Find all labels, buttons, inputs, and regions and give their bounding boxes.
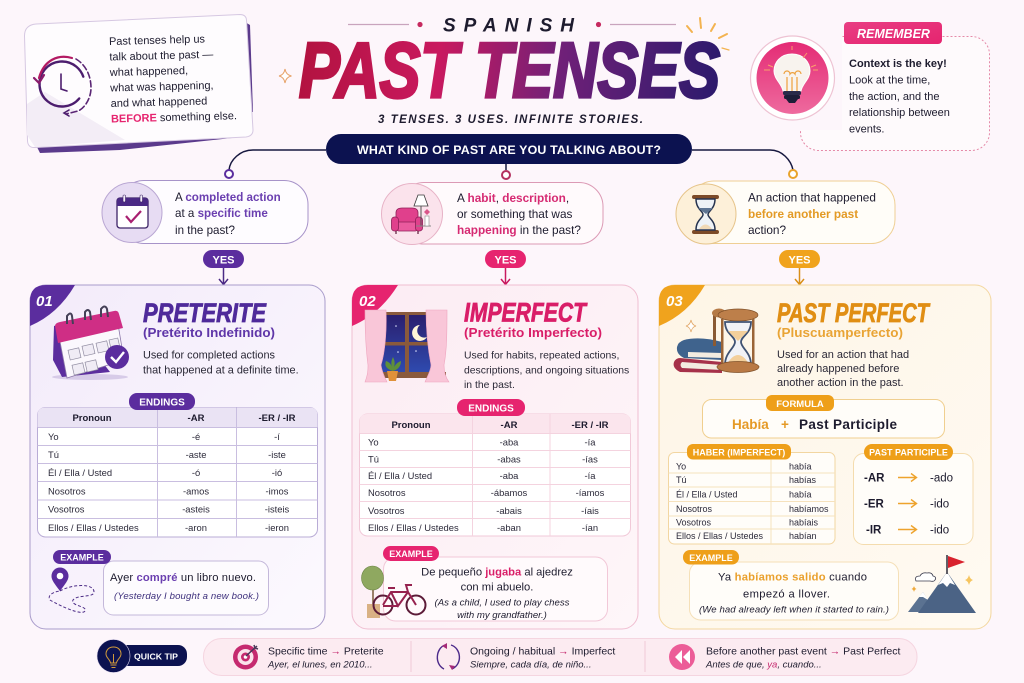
participle box: -IR [866,524,882,536]
endings table: -aste [186,449,206,460]
example box [104,561,268,615]
icon: bicycle and tree [362,566,426,618]
icon: night window with curtains [365,310,449,382]
endings table [38,408,318,537]
example box: De pequeño jugaba al ajedrez [421,566,573,578]
endings table: Nosotros [48,486,86,496]
intro text: Past tenses help us [109,33,206,48]
yes 2 [485,250,526,284]
remember badge: REMEMBER [857,27,930,41]
icon: tip bulb [106,647,121,668]
formula box: Había [732,417,769,432]
quick tip bar [204,638,917,676]
endings table: -asteis [182,504,210,514]
endings table: Vosotros [368,505,405,516]
remember text: the action, and the [849,91,940,103]
connector lines [225,150,797,179]
question 3 [676,181,895,244]
endings table: -AR [501,420,518,431]
heading: PAST TENSES [299,26,720,114]
endings table: Tú [48,449,59,460]
tip: before: Before another past event → Past Perfect [706,646,900,658]
endings table: -í [274,431,280,442]
intro text: and what happened [110,95,207,110]
haber table: Tú [676,475,687,485]
panel heading: PAST PERFECT [777,298,931,328]
question 3 text: before another past [748,207,858,221]
tip: specific time: Ayer, el lunes, en 2010... [267,660,372,670]
remember text: Look at the time, [849,74,930,86]
example badge: EXAMPLE [60,552,104,562]
panel: imperfect [352,285,638,629]
endings table: -íais [581,505,599,516]
endings table: Ellos / Ellas / Ustedes [48,522,139,533]
number tab 03: 03 [666,293,683,310]
endings table [360,414,630,536]
endings table: -aron [185,522,207,533]
haber badge [687,444,791,460]
icon: armchair and lamp [382,184,442,244]
endings badge [457,399,525,416]
endings table: -aba [500,436,519,448]
remember text [849,58,950,136]
yes pills and arrows [203,250,820,284]
endings table: -íamos [576,487,605,498]
endings table: -ías [582,454,598,464]
quick tip badge [97,640,187,672]
tip: specific time: Specific time → Preterite [268,646,384,658]
question 2 [382,182,603,244]
panel heading [777,298,931,340]
intro text: what happened, [109,65,188,79]
panel: preterite [30,285,325,629]
example box: con mi abuelo. [461,582,533,594]
question 2 text [457,191,581,237]
remember text: Context is the key! [849,58,947,70]
quick tip badge: QUICK TIP [134,652,178,662]
tagline: 3 TENSES. 3 USES. INFINITE STORIES. [378,114,643,126]
question 1 text: at a specific time [175,207,268,220]
panel heading: IMPERFECT [464,298,588,328]
number tab 03 [659,285,705,326]
haber table: habías [789,475,817,485]
example box: Ayer compré un libro nuevo. [110,572,256,584]
number tab 01 [30,285,75,326]
remember badge [844,22,942,44]
example badge [53,550,111,564]
endings table: -AR [188,413,205,424]
question 2 text: A habit, description, [457,191,569,205]
question 1 text: A completed action [175,191,281,204]
endings table: -amos [183,486,209,496]
formula box: + [781,417,789,432]
example box [690,562,898,620]
icon: title rays [687,18,729,50]
tip: ongoing [437,643,615,670]
endings table: Él / Ella / Usted [48,467,112,478]
description: another action in the past. [777,377,904,389]
participle badge [864,444,953,460]
question 1 [102,180,308,244]
endings table: -ER / -IR [572,420,609,431]
icon: map pin with route [49,568,94,612]
remember callout [750,22,990,150]
endings table: -imos [266,486,289,496]
haber table: habíais [789,518,819,528]
haber table: Vosotros [676,518,712,528]
endings table: Él / Ella / Usted [368,470,432,481]
panel heading: (Pretérito Indefinido) [143,325,275,340]
endings table: -iste [268,449,286,460]
endings table: -isteis [265,504,290,514]
endings table: Nosotros [368,487,406,498]
haber table: Él / Ella / Usted [676,490,738,500]
intro text: BEFORE something else. [111,110,237,125]
description: that happened at a definite time. [143,364,299,376]
question 1 text [175,191,281,237]
endings table: -ó [192,467,200,478]
endings table: -aba [500,470,519,481]
number tab 02 [352,285,398,326]
participle badge: PAST PARTICIPLE [869,448,948,458]
haber table: Ellos / Ellas / Ustedes [676,531,764,541]
icon: title sparkle [279,69,292,83]
example box [384,557,608,621]
intro text: what was happening, [109,80,214,95]
endings table: -ER / -IR [259,413,296,424]
participle box: -AR [864,472,885,484]
example box: (We had already left when it started to rain.) [699,604,889,616]
yes 1: YES [212,254,235,266]
tip: ongoing: Ongoing / habitual → Imperfect [470,646,615,658]
overline: Spanish [348,16,676,36]
description: Used for completed actions [143,350,276,362]
yes 1 [203,250,244,284]
panel: past perfect [659,285,991,629]
participle box: -ER [864,498,884,510]
tip: before [669,644,900,670]
panel heading: PRETERITE [143,298,267,328]
icon: clock with rewind arrow [30,52,94,116]
haber table: había [789,490,812,500]
question 2 text: or something that was [457,207,573,221]
endings table: -é [192,431,200,442]
description [777,349,909,389]
endings badge: ENDINGS [468,404,514,414]
haber table: habíamos [789,504,829,514]
icon: hourglass [676,184,736,244]
panel heading [143,298,275,340]
participle box [854,454,973,544]
remember text: events. [849,124,884,136]
icon: light bulb [750,36,834,120]
yes 3: YES [788,254,811,266]
question 2 text: happening in the past? [457,223,581,237]
icon: hourglass and books [674,308,759,373]
example badge [683,550,739,564]
example badge: EXAMPLE [389,549,433,559]
icon: sparkle [686,320,696,332]
description [464,350,629,391]
panel heading [464,298,602,340]
description: descriptions, and ongoing situations [464,366,629,376]
number tab 01: 01 [36,293,53,310]
question 3 text: action? [748,223,786,237]
question banner [326,134,692,164]
endings table: Tú [368,454,379,464]
tip: before: Antes de que, ya, cuando... [705,660,822,670]
endings table: Yo [48,431,59,442]
title block [279,16,729,126]
tip: ongoing: Siempre, cada día, de niño... [470,660,591,670]
haber table [668,452,835,544]
description: Used for habits, repeated actions, [464,350,619,362]
yes 3 [779,250,820,284]
question 3 text: An action that happened [748,190,876,204]
haber table: Nosotros [676,504,713,514]
number tab 02: 02 [359,293,376,310]
panel heading: (Pluscuamperfecto) [777,325,903,340]
participle box: -ido [930,524,949,536]
description: already happened before [777,363,899,375]
description: Used for an action that had [777,349,909,361]
endings table: Vosotros [48,504,85,514]
example box: (As a child, I used to play chess [435,598,570,608]
endings table: -abais [496,505,522,516]
endings table: -ían [582,522,598,533]
remember text: relationship between [849,107,950,119]
formula box: Past Participle [799,417,897,432]
example badge [383,546,439,561]
example badge: EXAMPLE [689,553,733,563]
haber table: habían [789,531,817,541]
endings table: -aban [497,522,521,533]
example box: Ya habíamos salido cuando [718,572,867,584]
endings table: -ábamos [491,487,528,498]
endings table: -ía [585,436,596,448]
endings table: Pronoun [72,413,112,424]
endings table: -ió [272,467,282,478]
haber table: Yo [676,462,686,472]
intro text [108,33,237,126]
tip: specific time [233,644,384,670]
yes 2: YES [494,254,517,266]
endings table: Yo [368,436,379,448]
intro text: talk about the past — [109,49,213,64]
panel heading: (Pretérito Imperfecto) [464,325,602,340]
intro card [24,14,253,153]
icon: calendar check [102,182,162,242]
question 1 text: in the past? [175,224,235,237]
participle box: -ido [930,498,949,510]
endings badge: ENDINGS [139,398,185,408]
description: in the past. [464,380,515,391]
haber badge: HABER (IMPERFECT) [693,448,785,458]
question banner: WHAT KIND OF PAST ARE YOU TALKING ABOUT? [357,143,661,157]
endings badge [129,393,195,410]
description [143,350,299,376]
question 3 text [748,190,876,237]
endings table: -abas [497,454,521,464]
example box: (Yesterday I bought a new book.) [114,591,259,602]
formula badge [766,395,834,411]
formula badge: FORMULA [776,399,824,410]
endings table: -ieron [265,522,289,533]
icon: mountain with flag [908,555,976,613]
formula box [702,400,944,438]
endings table: Ellos / Ellas / Ustedes [368,522,459,533]
endings table: -ía [585,470,596,481]
haber table: había [789,462,812,472]
example box: empezó a llover. [743,588,830,600]
overline: Spanish: SPANISH [443,16,575,36]
example box: with my grandfather.) [457,610,547,621]
participle box: -ado [930,472,953,484]
endings table: Pronoun [391,420,431,431]
icon: wall calendar [52,306,129,380]
